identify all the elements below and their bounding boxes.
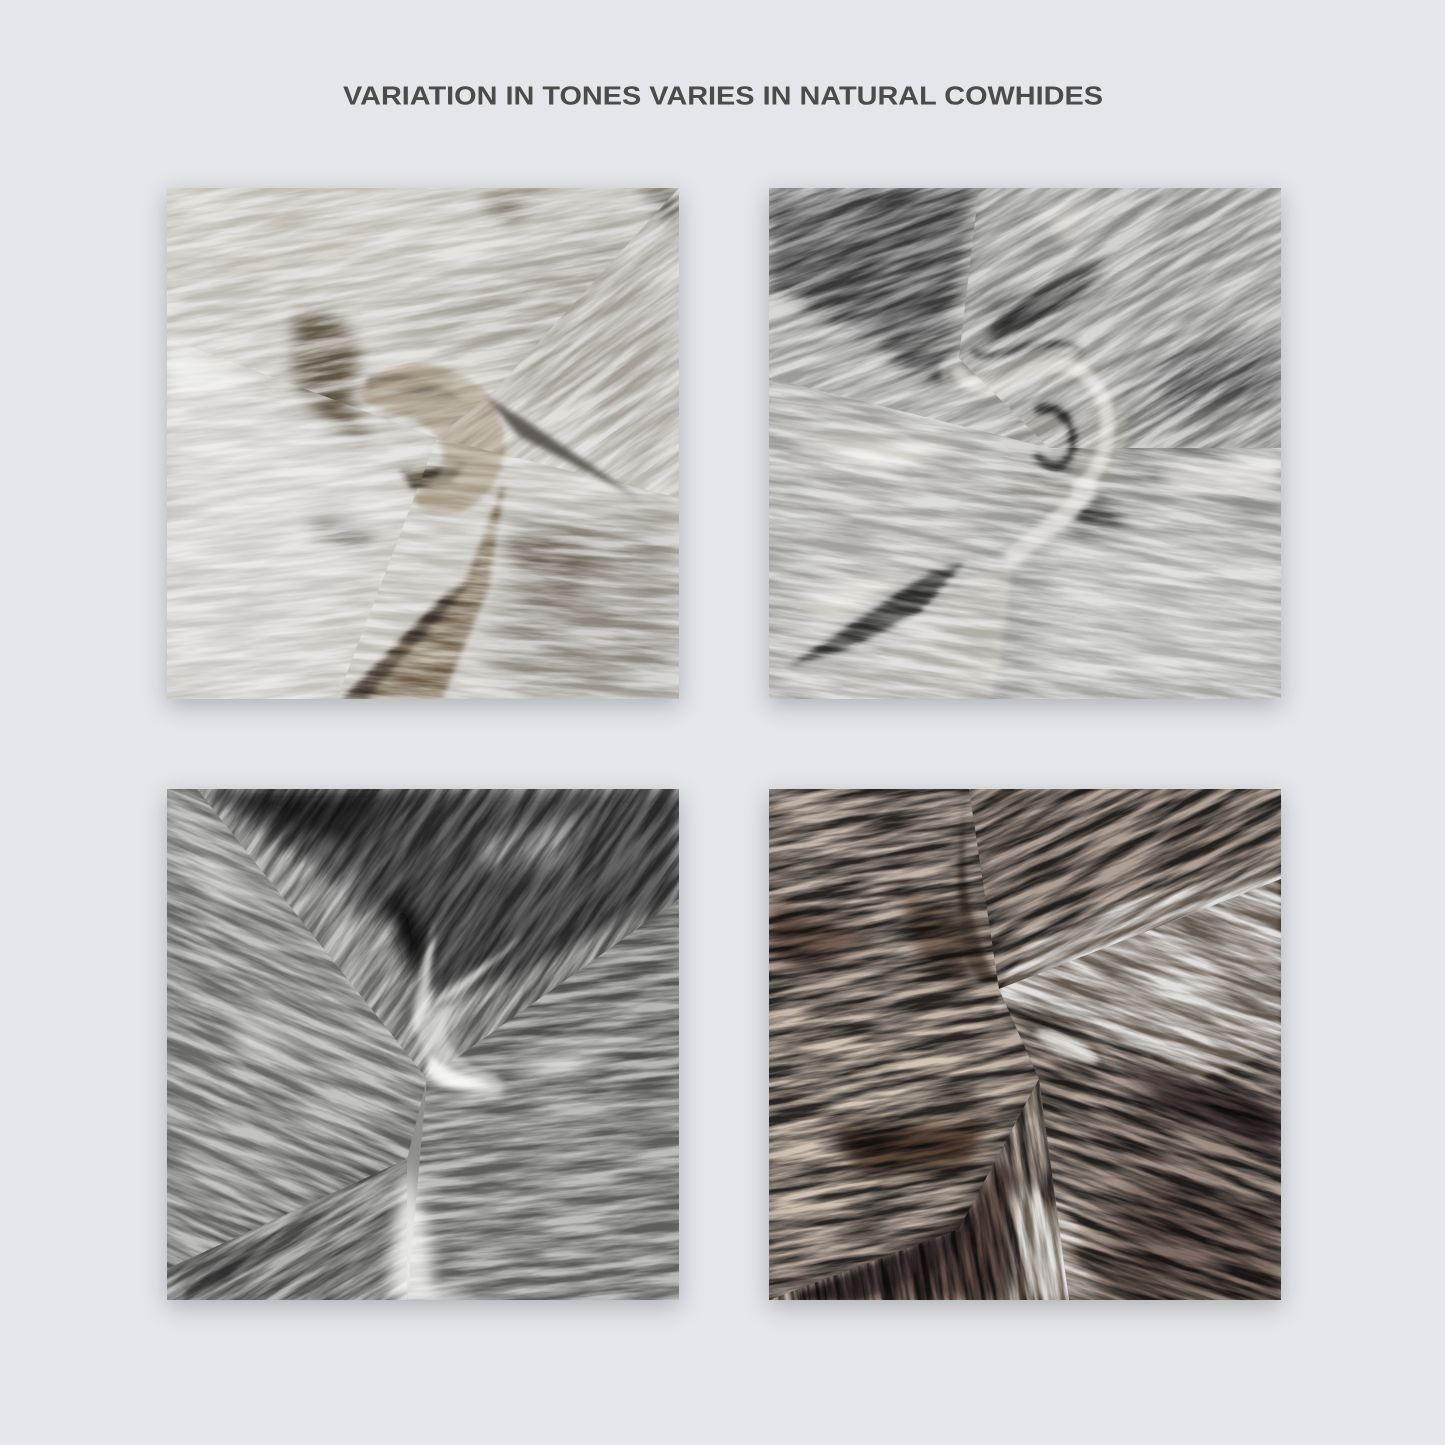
fur texture xyxy=(769,188,1281,699)
fur texture xyxy=(167,789,679,1300)
fur texture xyxy=(769,789,1281,1300)
hide fold: centre curl xyxy=(182,919,537,1299)
panel: medium grey cowhide swatch xyxy=(769,188,1281,699)
hide fold: brown wedge xyxy=(342,480,505,699)
fur texture xyxy=(167,188,679,699)
panel: dark grey cowhide swatch xyxy=(167,789,679,1300)
panel: dark brown cowhide swatch xyxy=(769,789,1281,1300)
hide fold: centre swirl xyxy=(799,789,1281,1300)
hide fold: swirl highlight and dark crease xyxy=(359,365,642,514)
hide fold: centre swirl xyxy=(959,344,1108,556)
title: VARIATION IN TONES VARIES IN NATURAL COWHIDES xyxy=(343,80,1103,110)
hide fold: centre swirl xyxy=(359,365,504,514)
panel: light grey cowhide swatch xyxy=(167,188,679,699)
hide fold: bottom flap xyxy=(789,548,1014,699)
